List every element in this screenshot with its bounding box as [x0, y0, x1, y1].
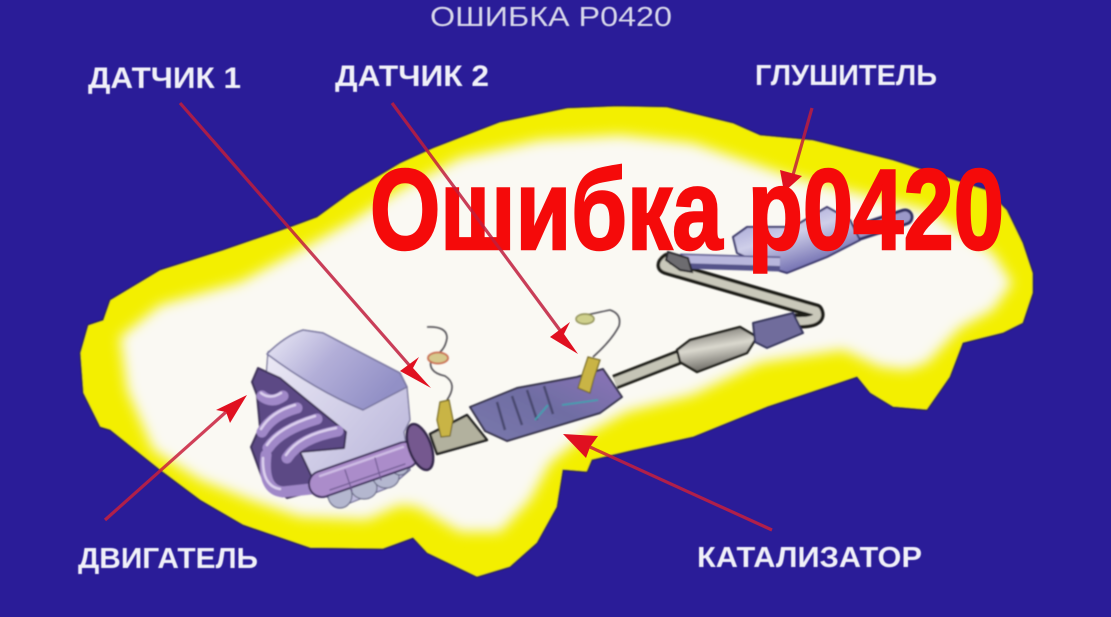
label: двигатель: ДВИГАТЕЛЬ	[78, 543, 258, 575]
catalytic converter	[470, 369, 622, 441]
muffler tube	[680, 261, 780, 264]
manifold tubes	[261, 393, 405, 492]
arrow: катализатор	[563, 434, 772, 530]
engine block	[262, 330, 410, 507]
label: датчик 1: ДАТЧИК 1	[88, 62, 241, 95]
sensor 1 wire	[427, 327, 452, 400]
sensor 2 body	[578, 357, 600, 393]
tube joint	[666, 252, 692, 272]
engine cover	[267, 330, 407, 410]
sensor 2 wire	[578, 310, 620, 357]
manifold flange	[401, 421, 439, 473]
pipe flange	[753, 313, 803, 348]
mid pipe	[615, 356, 682, 382]
tailpipe	[850, 217, 905, 235]
muffler	[733, 207, 860, 273]
manifold shadow	[251, 368, 346, 498]
resonator	[677, 327, 757, 372]
arrow: датчик 2	[392, 103, 578, 354]
heading: ошибка p0420: ОШИБКА Р0420	[430, 1, 672, 32]
engine sump lumps	[328, 455, 409, 508]
label: катализатор: КАТАЛИЗАТОР	[697, 542, 922, 574]
front pipe	[430, 415, 487, 454]
arrow: глушитель	[780, 108, 812, 192]
sensor 1 body	[437, 400, 453, 437]
exhaust system illustration	[251, 207, 905, 508]
label: датчик 2: ДАТЧИК 2	[335, 60, 489, 93]
arrow: датчик 1	[180, 103, 431, 388]
label: глушитель: ГЛУШИТЕЛЬ	[755, 60, 937, 92]
rear pipe	[664, 260, 817, 321]
car silhouette	[80, 106, 1033, 577]
arrow: двигатель	[105, 395, 247, 520]
